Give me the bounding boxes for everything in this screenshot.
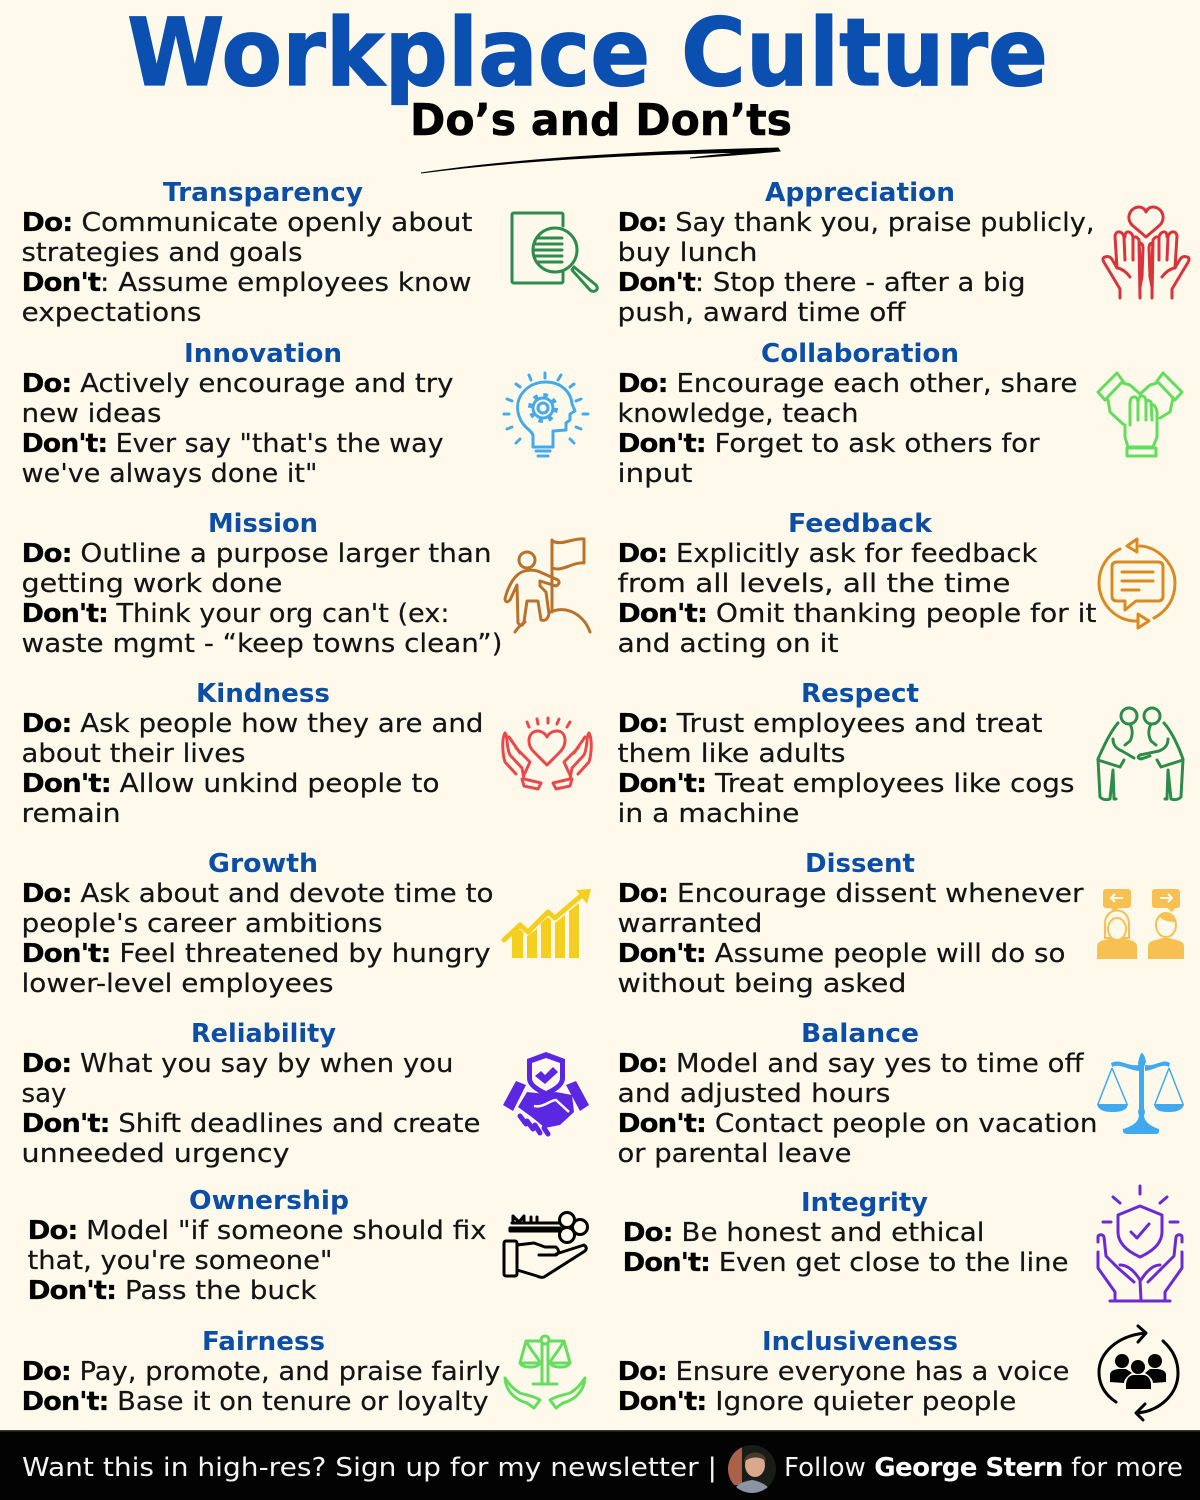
panel: Feedback (618, 509, 1175, 659)
text: Respect do and don't (618, 709, 1074, 829)
text: Kindness do and don't: remain (22, 799, 120, 829)
text: Respect do and don't: them like adults (618, 739, 846, 769)
text: Transparency do and don't: Don't: Assume employees know (22, 268, 472, 298)
text: Balance do and don't (618, 1049, 1098, 1169)
text: Growth do and don't: Don't: Feel threatened by hungry (22, 939, 490, 969)
heading: Growth: Growth (208, 849, 318, 879)
panel: Mission (22, 509, 590, 659)
heading: Dissent: Dissent (805, 849, 915, 879)
panel: Collaboration (618, 339, 1182, 489)
text: Fairness do and don't: Do: Pay, promote, and praise fairly (22, 1357, 500, 1387)
heading: Kindness: Kindness (196, 679, 330, 709)
heading: Respect: Respect (801, 679, 919, 709)
icon: hands holding heart (503, 718, 591, 789)
text: Integrity do and don't: Don't: Even get close to the line (622, 1248, 1068, 1278)
heading: Ownership: Ownership (189, 1186, 349, 1216)
text: Transparency do and don't: expectations (22, 298, 202, 328)
text: Ownership do and don't: Do: Model "if someone should fix (28, 1216, 487, 1246)
text: Reliability do and don't: Do: What you say by when you (22, 1049, 454, 1079)
panel: Kindness (22, 679, 591, 829)
text: Dissent do and don't: without being asked (618, 969, 906, 999)
text: Integrity do and don't: Do: Be honest and ethical (622, 1218, 984, 1248)
heading: Mission: Mission (208, 509, 318, 539)
heading: Balance: Balance (801, 1019, 919, 1049)
text: Inclusiveness do and don't (618, 1357, 1070, 1417)
icon: hand holding key (504, 1212, 588, 1277)
panel: Inclusiveness (618, 1326, 1178, 1420)
icon: person climbing with flag (505, 539, 590, 632)
text: Innovation do and don't: new ideas (22, 399, 162, 429)
icon: shield and handshake (503, 1052, 589, 1134)
text: Dissent do and don't: Do: Encourage dissent whenever (618, 879, 1084, 909)
text: Transparency do and don't: Do: Communicate openly about (22, 208, 472, 238)
panel: Integrity (622, 1186, 1182, 1301)
text: Collaboration do and don't: Don't: Forget to ask others for (618, 429, 1040, 459)
icon: stacked hands (1098, 373, 1182, 456)
text: Collaboration do and don't (618, 369, 1078, 489)
icon: speech bubble in refresh cycle (1099, 539, 1175, 628)
text: Feedback do and don't: and acting on it (618, 629, 838, 659)
panel: Fairness (22, 1327, 585, 1417)
text: Growth do and don't: lower-level employees (22, 969, 333, 999)
text: Collaboration do and don't: knowledge, teach (618, 399, 858, 429)
heading: Transparency: Transparency (163, 178, 363, 208)
panel: Reliability (22, 1019, 589, 1169)
brush underline (421, 148, 780, 173)
heading: Appreciation: Appreciation (765, 178, 955, 208)
text: Integrity do and don't (622, 1218, 1068, 1278)
heading: Inclusiveness: Inclusiveness (762, 1327, 958, 1357)
icon: document with magnifier (512, 213, 597, 291)
text: Reliability do and don't: Don't: Shift deadlines and create (22, 1109, 480, 1139)
panel: Growth (22, 849, 591, 999)
text: Ownership do and don't: that, you're someone" (28, 1246, 332, 1276)
text: Dissent do and don't: warranted (618, 909, 762, 939)
text: Kindness do and don't (22, 709, 484, 829)
footer text: newsletter: Want this in high-res? Sign up for my newsletter | (22, 1453, 717, 1483)
text: Mission do and don't (22, 539, 502, 659)
panel: Ownership (28, 1186, 588, 1306)
text: Reliability do and don't: unneeded urgency (22, 1139, 290, 1169)
icon: group of people in cycle arrows (1099, 1326, 1178, 1420)
text: Transparency do and don't: strategies and goals (22, 238, 302, 268)
panel: Innovation (22, 339, 588, 489)
avatar photo (728, 1445, 776, 1493)
text: Appreciation do and don't: push, award time off (618, 298, 907, 328)
text: Respect do and don't: in a machine (618, 799, 800, 829)
icon: two people with opposite arrows (1097, 889, 1184, 959)
text: Growth do and don't (22, 879, 494, 999)
text: Feedback do and don't: from all levels, all the time (618, 569, 1010, 599)
icon: raised hands and heart (1103, 207, 1189, 298)
text: Reliability do and don't (22, 1049, 480, 1169)
text: Ownership do and don't: Don't: Pass the buck (28, 1276, 316, 1306)
text: Inclusiveness do and don't: Don't: Ignore quieter people (618, 1387, 1016, 1417)
text: Reliability do and don't: say (22, 1079, 66, 1109)
subtitle: Do’s and Don’ts (410, 95, 792, 146)
heading: Innovation: Innovation (184, 339, 342, 369)
heading: Integrity: Integrity (801, 1188, 928, 1218)
text: Appreciation do and don't: Do: Say thank you, praise publicly, (618, 208, 1094, 238)
icon: lightbulb with gear head (504, 373, 588, 456)
text: Balance do and don't: Don't: Contact people on vacation (618, 1109, 1098, 1139)
title: Workplace Culture (127, 0, 1048, 108)
text: Feedback do and don't (618, 539, 1096, 659)
text: Dissent do and don't: Don't: Assume people will do so (618, 939, 1066, 969)
text: Innovation do and don't: Don't: Ever say "that's the way (22, 429, 444, 459)
text: Growth do and don't: people's career ambitions (22, 909, 382, 939)
text: Kindness do and don't: about their lives (22, 739, 245, 769)
text: Inclusiveness do and don't: Do: Ensure everyone has a voice (618, 1357, 1070, 1387)
text: Mission do and don't: getting work done (22, 569, 282, 599)
text: Fairness do and don't (22, 1357, 500, 1417)
text: Appreciation do and don't (618, 208, 1094, 328)
icon: two people shaking hands (1098, 708, 1183, 800)
text: Kindness do and don't: Do: Ask people how they are and (22, 709, 484, 739)
text: Fairness do and don't: Don't: Base it on tenure or loyalty (22, 1387, 488, 1417)
text: Appreciation do and don't: buy lunch (618, 238, 758, 268)
panel: Respect (618, 679, 1183, 829)
text: Innovation do and don't: we've always done it" (22, 459, 318, 489)
text: Appreciation do and don't: Don't: Stop there - after a big (618, 268, 1026, 298)
text: Growth do and don't: Do: Ask about and devote time to (22, 879, 494, 909)
icon: rising bar chart with arrow (504, 889, 591, 958)
text: Mission do and don't: Do: Outline a purpose larger than (22, 539, 491, 569)
heading: Reliability: Reliability (191, 1019, 336, 1049)
icon: hands and shield with check (1098, 1186, 1182, 1301)
text: Collaboration do and don't: input (618, 459, 692, 489)
panel: Dissent (618, 849, 1184, 999)
footer text: follow: Follow George Stern for more (784, 1453, 1183, 1483)
text: Balance do and don't: or parental leave (618, 1139, 852, 1169)
icon: balance scales (1097, 1053, 1184, 1134)
footer bar (0, 1430, 1200, 1500)
panel: Balance (618, 1019, 1184, 1169)
panel: Transparency (22, 178, 597, 328)
text: Dissent do and don't (618, 879, 1084, 999)
icon: scales held by hands (505, 1336, 585, 1408)
heading: Feedback: Feedback (788, 509, 933, 539)
text: Innovation do and don't: Do: Actively encourage and try (22, 369, 454, 399)
panel: Appreciation (618, 178, 1189, 328)
heading: Collaboration: Collaboration (761, 339, 959, 369)
text: Respect do and don't: Do: Trust employees and treat (618, 709, 1042, 739)
text: Ownership do and don't (28, 1216, 487, 1306)
text: Mission do and don't: Don't: Think your org can't (ex: (22, 599, 450, 629)
heading: Fairness: Fairness (202, 1327, 325, 1357)
text: Collaboration do and don't: Do: Encourage each other, share (618, 369, 1078, 399)
text: Feedback do and don't: Don't: Omit thanking people for it (618, 599, 1096, 629)
text: Transparency do and don't (22, 208, 472, 328)
text: Innovation do and don't (22, 369, 454, 489)
text: Balance do and don't: and adjusted hours (618, 1079, 890, 1109)
text: Kindness do and don't: Don't: Allow unkind people to (22, 769, 440, 799)
text: Balance do and don't: Do: Model and say yes to time off (618, 1049, 1085, 1079)
text: Respect do and don't: Don't: Treat employees like cogs (618, 769, 1074, 799)
text: Mission do and don't: waste mgmt - “keep towns clean”) (22, 629, 502, 659)
text: Feedback do and don't: Do: Explicitly ask for feedback (618, 539, 1038, 569)
